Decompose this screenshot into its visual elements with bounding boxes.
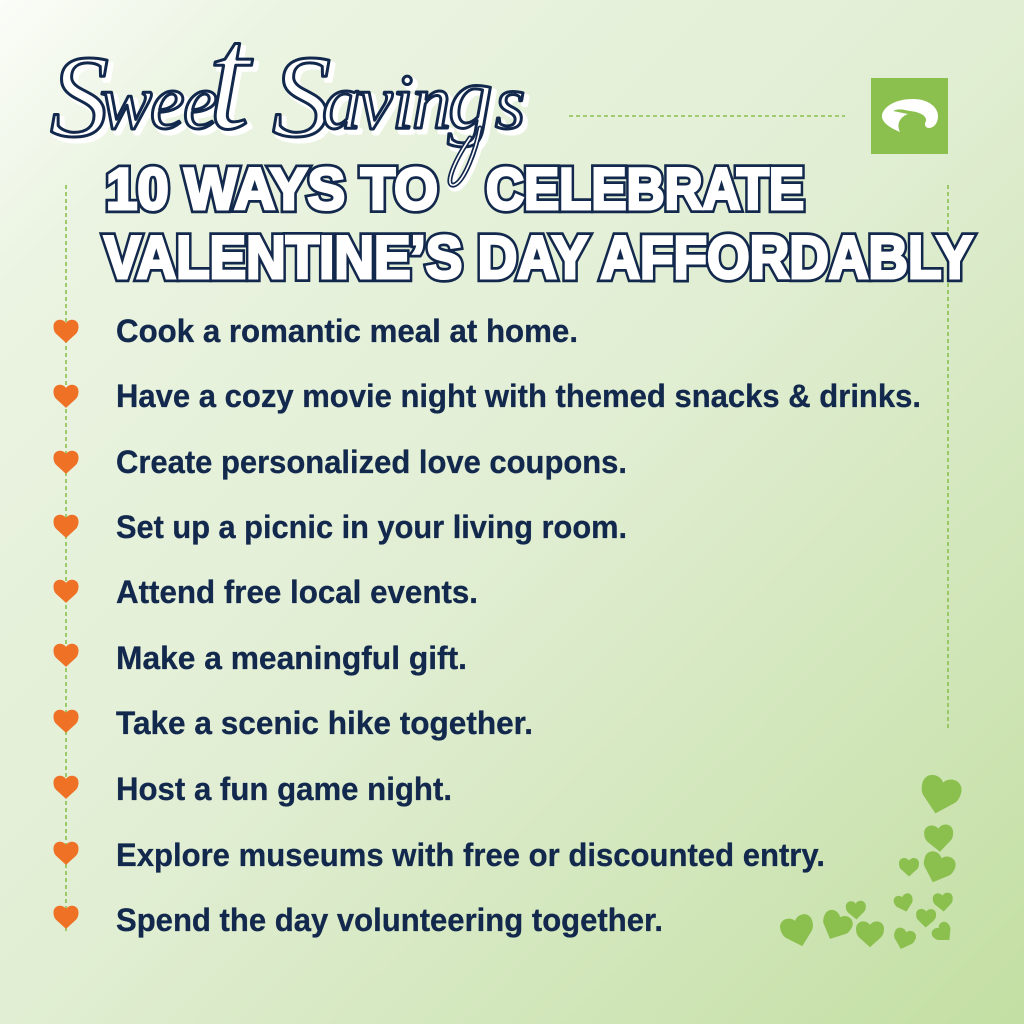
list: ten ways (54, 313, 921, 938)
title: script heading: i (392, 58, 414, 145)
title: script heading: n (412, 58, 451, 145)
title: main heading: CELEBRATE (486, 157, 804, 222)
title: script heading: a (326, 62, 365, 149)
title: script heading: e (183, 58, 218, 145)
title: main heading (104, 157, 973, 291)
title: main heading: 10 WAYS TO (106, 157, 438, 222)
item 7: Take a scenic hike together. (116, 705, 533, 741)
item 9: Explore museums with free or discounted entry. (116, 837, 825, 873)
title: script heading: n (416, 62, 455, 149)
title: script heading: a (322, 58, 361, 145)
title: script heading: v (362, 62, 397, 149)
title: script heading: g (452, 53, 497, 152)
title: script heading: t (212, 0, 257, 165)
title: script heading: g (448, 49, 493, 148)
item 10: Spend the day volunteering together. (116, 902, 663, 938)
title: script heading: w (104, 62, 156, 149)
title: script heading: e (187, 62, 222, 149)
logo (871, 78, 948, 154)
title: script heading: S (54, 35, 113, 166)
item 2: Have a cozy movie night with themed snacks & drinks. (116, 378, 921, 414)
title: script heading: e (150, 58, 185, 145)
item 3: Create personalized love coupons. (116, 444, 627, 480)
item 8: Host a fun game night. (116, 771, 452, 807)
title: script heading (50, 0, 529, 187)
title: script heading: S (276, 35, 335, 166)
title: main heading: 10 WAYS TO (106, 157, 438, 222)
title: script heading: S (50, 31, 109, 162)
item 5: Attend free local events. (116, 574, 478, 610)
title: script heading: v (358, 58, 393, 145)
title: script heading: e (154, 62, 189, 149)
title: script heading: i (396, 62, 418, 149)
title: script heading: s (499, 62, 529, 149)
item 6: Make a meaningful gift. (116, 640, 467, 676)
title: script heading: s (495, 58, 525, 145)
title: script heading: S (272, 31, 331, 162)
icon: cluster of green hearts (778, 773, 964, 952)
title: script heading: w (100, 58, 152, 145)
item 4: Set up a picnic in your living room. (116, 509, 627, 545)
title: main heading: CELEBRATE (486, 157, 804, 222)
item 1: Cook a romantic meal at home. (116, 313, 578, 349)
